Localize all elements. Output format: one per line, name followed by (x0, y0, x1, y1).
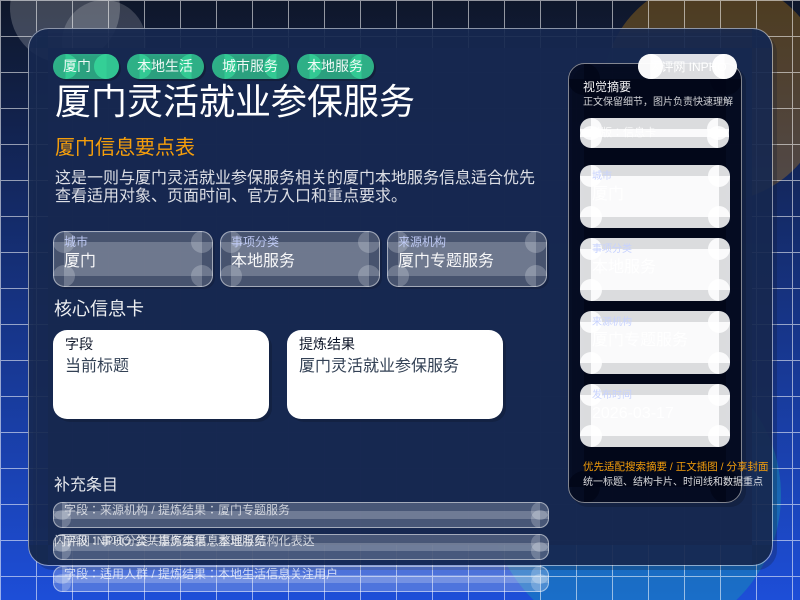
supplementary rows (53, 502, 549, 592)
tag: 本地生活 (127, 54, 206, 81)
stat cards (53, 231, 549, 289)
intro paragraph: 查看适用对象、页面时间、官方入口和重点要求。 (55, 187, 407, 205)
section heading: 补充条目: 补充条目 (54, 476, 118, 494)
section heading: 核心信息卡: 核心信息卡 (54, 299, 144, 319)
panel block: 事项分类: 本地服务 (592, 258, 656, 276)
row: 适用人群: 字段：适用人群 / 提炼结果：本地生活信息关注用户 (64, 566, 338, 581)
core card: 字段: 当前标题 (65, 357, 129, 375)
tag: 本地服务 (297, 54, 376, 81)
panel pill: 模版：信息卡 (590, 125, 656, 139)
panel heading: 视觉摘要 (583, 79, 631, 94)
core card: 提炼结果: 厦门灵活就业参保服务 (299, 357, 459, 375)
core card: 字段: 字段 (65, 336, 93, 352)
row: 事项分类 (53, 533, 549, 560)
stat card: 城市 (53, 231, 215, 289)
panel subheading: 正文保留细节，图片负责快速理解 (583, 95, 733, 108)
tag: 厦门: 厦门 (63, 58, 91, 74)
stat card: 事项分类: 本地服务 (231, 252, 295, 270)
tags (53, 54, 376, 81)
stat card: 城市: 厦门 (64, 252, 96, 270)
stat card: 城市: 城市 (64, 235, 88, 249)
core card: 提炼结果 (287, 330, 506, 422)
row: 来源机构: 字段：来源机构 / 提炼结果：厦门专题服务 (64, 502, 290, 517)
panel block: 城市 (580, 165, 730, 228)
panel block: 事项分类 (580, 238, 730, 301)
tag: 城市服务 (212, 54, 291, 81)
row: 适用人群 (53, 566, 549, 592)
row: 来源机构 (53, 502, 549, 528)
panel note: white: 统一标题、结构卡片、时间线和数据重点 (583, 475, 763, 488)
stat card: 来源机构: 厦门专题服务 (398, 252, 494, 270)
panel block: 发布时间 (580, 384, 730, 447)
panel pill (580, 118, 729, 148)
stat card: 来源机构: 来源机构 (398, 235, 446, 249)
core card: 字段 (53, 330, 272, 422)
stat card: 来源机构 (387, 231, 549, 289)
row: 事项分类: 字段：事项分类 / 提炼结果：本地服务 (64, 533, 266, 548)
brand badge: 闪评网 INPHO (649, 60, 727, 74)
panel block: 来源机构: 厦门专题服务 (592, 331, 688, 349)
panel block: 来源机构 (580, 311, 730, 374)
panel block: 事项分类: 事项分类 (592, 242, 632, 255)
tag: 本地服务: 本地服务 (307, 58, 363, 74)
stat card: 事项分类 (220, 231, 382, 289)
footer note: 闪评网 INPHO 公共事务类信息整理与结构化表达 (54, 533, 315, 548)
tag: 厦门 (53, 54, 121, 81)
panel block: 城市: 城市 (592, 169, 612, 182)
tag: 城市服务: 城市服务 (222, 58, 278, 74)
panel block: 发布时间: 发布时间 (592, 388, 632, 401)
intro paragraph: 这是一则与厦门灵活就业参保服务相关的厦门本地服务信息适合优先 (55, 169, 535, 187)
panel note: orange: 优先适配搜索摘要 / 正文插图 / 分享封面 (583, 460, 769, 473)
panel block: 来源机构: 来源机构 (592, 315, 632, 328)
brand badge (638, 54, 737, 79)
subtitle: 厦门信息要点表 (55, 136, 195, 159)
stat card: 事项分类: 事项分类 (231, 234, 279, 249)
panel block: 发布时间: 2026-03-17 (592, 405, 674, 422)
panel block: 城市: 厦门 (592, 185, 624, 203)
right panel (568, 63, 769, 507)
tag: 本地生活: 本地生活 (137, 58, 193, 74)
core card: 提炼结果: 提炼结果 (299, 336, 355, 352)
title: 厦门灵活就业参保服务 (55, 81, 415, 122)
